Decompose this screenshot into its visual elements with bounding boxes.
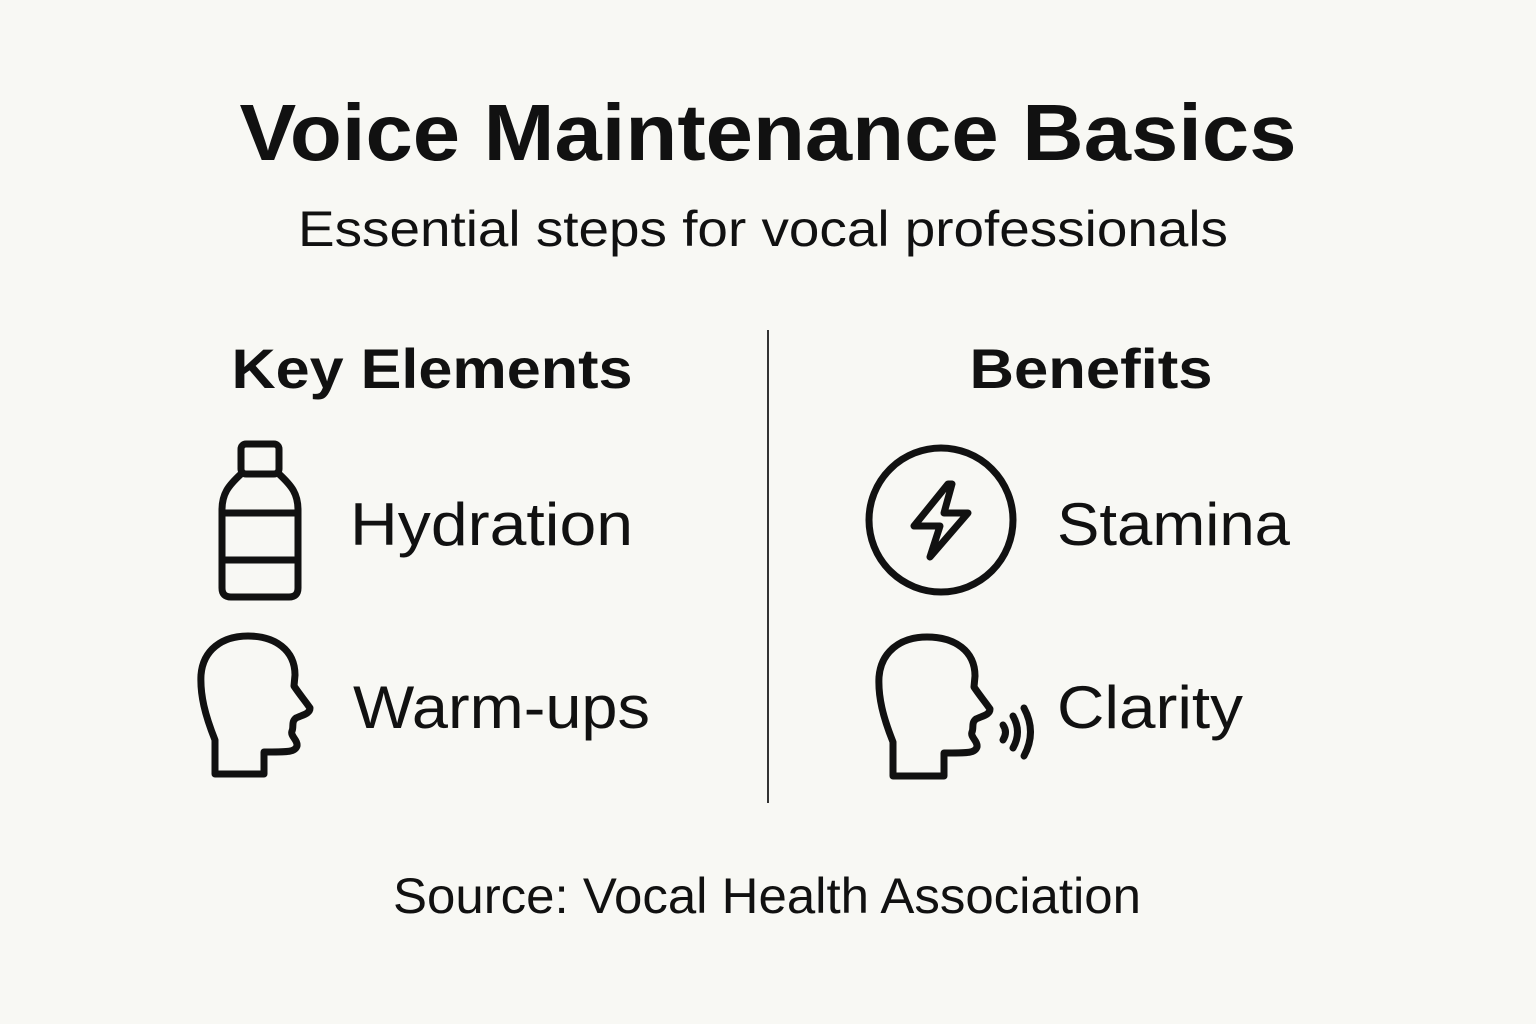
text: warm-ups: Warm-ups [353, 674, 650, 741]
icon: bottle [222, 444, 298, 597]
text: hydration: Hydration [350, 491, 633, 558]
title: Voice Maintenance Basics [240, 88, 1296, 177]
subtitle: Essential steps for vocal professionals [298, 201, 1228, 257]
icon: head with sound [879, 637, 1030, 776]
heading: benefits: Benefits [970, 337, 1212, 400]
source: Source: Vocal Health Association [393, 868, 1141, 924]
text: clarity: Clarity [1057, 674, 1243, 741]
text: stamina: Stamina [1057, 491, 1291, 558]
icon: lightning circle [869, 448, 1013, 592]
heading: key elements: Key Elements [232, 337, 632, 400]
icon: head warm-ups [201, 636, 310, 774]
